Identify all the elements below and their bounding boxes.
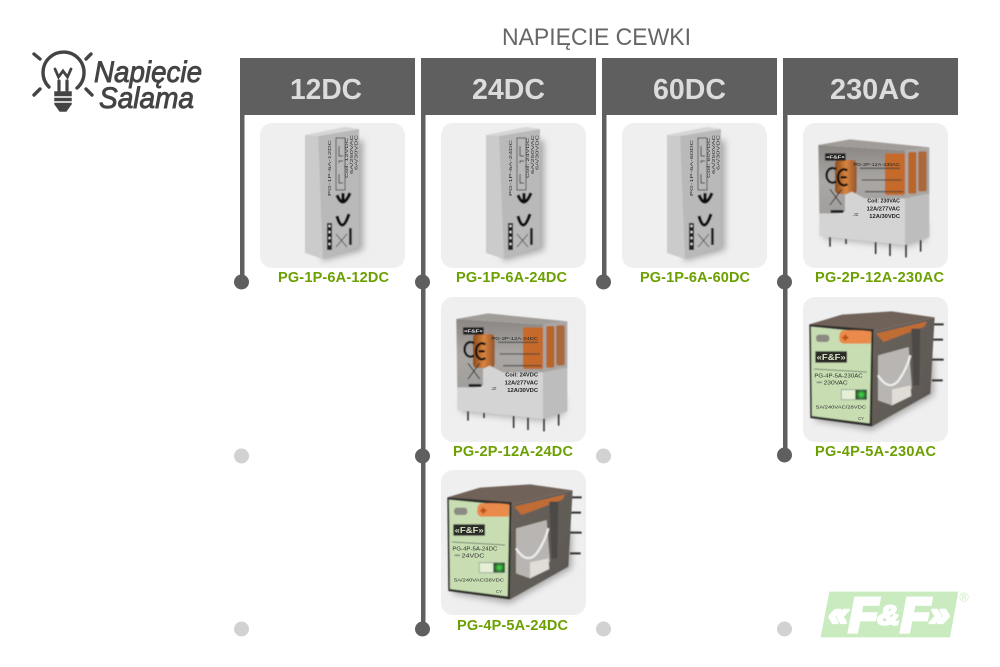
relay image: 6A/250VAC (530, 134, 535, 174)
relay image (486, 127, 544, 261)
relay image: PG-2P-12A-230AC (853, 162, 900, 168)
column header: 24DC: 24DC (472, 74, 545, 106)
relay image: Coil: 60VDC (706, 137, 711, 178)
column header: 12DC: 12DC (290, 74, 362, 106)
column connector lines and dots (234, 110, 792, 636)
relay image: 6A/250VAC (711, 134, 716, 174)
relay image (667, 127, 725, 261)
relay image: CY (858, 416, 864, 421)
relay image: PG-1P-6A-24DC (508, 139, 513, 196)
product label: PG-2P-12A-230AC (815, 270, 945, 286)
relay image: PG-1P-6A-60DC (689, 139, 694, 196)
relay image: 6A/250VAC (349, 134, 354, 174)
column header: 60DC: 60DC (653, 74, 726, 106)
product label: PG-4P-5A-24DC (457, 618, 569, 634)
relay image: PG-4P-5A-24DC (452, 546, 497, 552)
column header: 60DC (602, 58, 777, 115)
relay image: «F&F» (455, 526, 484, 535)
product card: PG-1P-6A-12DC (260, 123, 405, 286)
relay image: JZ (491, 386, 497, 391)
relay image: «F&F» (464, 329, 483, 335)
product card: PG-2P-12A-24DC (441, 297, 586, 460)
logo: Napięcie Salama (34, 52, 202, 115)
logo: F&F brand: « (828, 597, 849, 634)
relay image: «F&F» (826, 155, 845, 161)
logo wordmark: Napięcie (94, 56, 202, 89)
logo wordmark (94, 56, 202, 115)
relay image (809, 311, 944, 430)
relay image: PG-1P-6A-12DC (327, 139, 332, 196)
relay image: 6A/30VDC (716, 134, 720, 170)
product label: PG-1P-6A-24DC (456, 270, 568, 286)
logo: F&F brand (821, 588, 969, 642)
relay image: Coil: 24VDC (505, 373, 538, 379)
relay image: Coil: 24VDC (525, 137, 530, 178)
relay image: 5A/240VAC/28VDC (454, 577, 504, 583)
product label: PG-1P-6A-60DC (640, 270, 751, 286)
column header: 24DC (421, 58, 596, 115)
title: NAPIĘCIE CEWKI (502, 24, 691, 51)
relay image: 5A/240VAC/28VDC (816, 404, 866, 410)
relay image: Coil: 12VDC (344, 137, 349, 178)
product card: PG-4P-5A-230AC (803, 297, 948, 460)
product label: PG-2P-12A-24DC (453, 444, 574, 460)
logo: F&F brand: & (877, 599, 900, 630)
product card: PG-2P-12A-230AC (803, 123, 948, 286)
relay image: 6A/30VDC (534, 134, 540, 170)
logo: F&F brand: F (849, 588, 879, 642)
product label: PG-1P-6A-12DC (278, 270, 390, 286)
relay image: CY (496, 589, 502, 594)
icon: light bulb (34, 52, 92, 111)
relay image: 12A/30VDC (869, 214, 900, 220)
relay image: 12A/277VAC (505, 380, 538, 386)
relay image: PG-2P-12A-24DC (491, 336, 538, 342)
product label: PG-4P-5A-230AC (815, 444, 937, 460)
relay image: Coil: 230VAC (867, 199, 900, 205)
relay image: PG-4P-5A-230AC (814, 373, 863, 379)
relay image (456, 313, 567, 431)
column header: 230AC (783, 58, 958, 115)
logo: F&F brand: ® (959, 590, 969, 604)
relay image (305, 127, 363, 261)
product card: PG-1P-6A-24DC (441, 123, 586, 286)
relay image: 12A/30VDC (507, 388, 538, 394)
relay image: 12A/277VAC (867, 206, 900, 212)
logo: F&F brand: » (929, 597, 950, 634)
relay image: 230VAC (824, 380, 848, 386)
product card: PG-4P-5A-24DC (441, 470, 586, 634)
relay image: «F&F» (817, 353, 846, 362)
product card: PG-1P-6A-60DC (622, 123, 767, 286)
relay image: 24VDC (462, 553, 485, 559)
column header: 12DC (240, 58, 415, 115)
logo: F&F brand: F (901, 588, 931, 642)
relay image: 6A/30VDC (354, 134, 358, 170)
relay image (447, 484, 582, 603)
relay image (818, 139, 929, 257)
column header: 230AC: 230AC (830, 74, 920, 106)
relay image: JZ (853, 212, 859, 217)
logo wordmark: Salama (99, 82, 194, 115)
